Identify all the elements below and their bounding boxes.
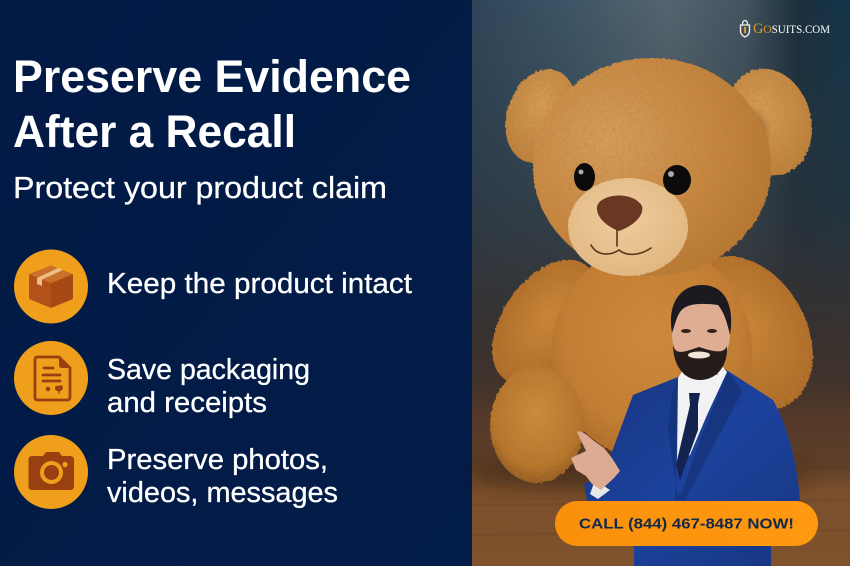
icon: receipt document [14,341,88,415]
bear nose [597,196,642,231]
bear body and arms [470,233,839,460]
list item: save packaging and receipts [14,341,310,419]
suit [584,369,800,566]
bear paw [490,367,584,483]
figure: attorney in blue suit [571,285,800,566]
bear muzzle [568,178,688,276]
bear mouth [591,230,651,254]
head [671,285,731,380]
text: preserve photos videos messages: videos, messages [107,477,338,509]
subtitle: Protect your product claim [13,170,387,205]
shirt [677,366,727,462]
title: Preserve Evidence [13,51,411,102]
logo wordmark: GOSUITS.COM [753,21,830,37]
call to action button: CALL (844) 467-8487 NOW! [579,516,794,532]
panel: navy text background [0,0,472,566]
bear ears [494,59,824,185]
illustration: teddy bear [470,58,839,491]
list item: preserve photos videos messages [14,435,338,509]
panel: photo background [472,0,850,566]
call to action button [555,501,818,546]
icon: lock shield [740,20,750,37]
logo: Gosuits.com [740,20,830,37]
text: save packaging and receipts: Save packaging [107,354,310,386]
tie [676,393,700,480]
bear head [533,58,771,276]
hand [571,431,620,490]
text: keep the product intact: Keep the product intact [107,268,412,300]
list item: keep product intact [14,250,412,324]
text: preserve photos videos messages [107,444,338,509]
text: save packaging and receipts [107,354,310,419]
shirt cuff [590,480,610,499]
title [13,51,411,157]
text: save packaging and receipts: and receipts [107,387,267,419]
text: preserve photos videos messages: Preserve photos, [107,444,328,476]
icon: box [14,250,88,324]
title: After a Recall [13,106,296,157]
bear eyes [574,163,691,195]
suit lapels and shading [668,372,742,500]
icon: camera [14,435,88,509]
